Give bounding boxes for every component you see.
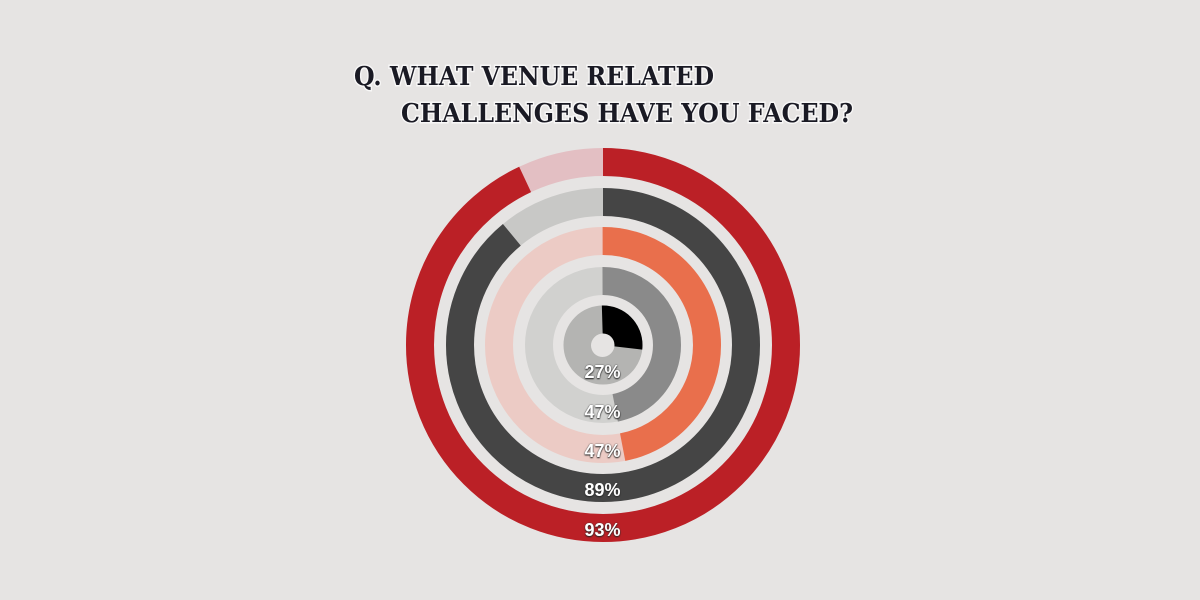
- ring: 47% orange: [499, 241, 707, 449]
- title: Q. WHAT VENUE RELATED: [354, 62, 714, 92]
- percentage labels: 47%: [584, 441, 621, 461]
- ring: 89%: [460, 202, 746, 488]
- title: [354, 62, 853, 129]
- percentage labels: 47%: [584, 402, 621, 422]
- ring: 93%: [420, 162, 786, 528]
- percentage labels: [584, 362, 621, 540]
- centre hole: [591, 334, 614, 357]
- percentage labels: 93%: [584, 520, 621, 540]
- title: CHALLENGES HAVE YOU FACED?: [401, 99, 853, 129]
- ring: 47% grey: [539, 281, 667, 409]
- ring: 27%: [578, 320, 628, 370]
- percentage labels: 89%: [584, 480, 621, 500]
- radial bar chart: [420, 162, 786, 540]
- percentage labels: 27%: [584, 362, 621, 382]
